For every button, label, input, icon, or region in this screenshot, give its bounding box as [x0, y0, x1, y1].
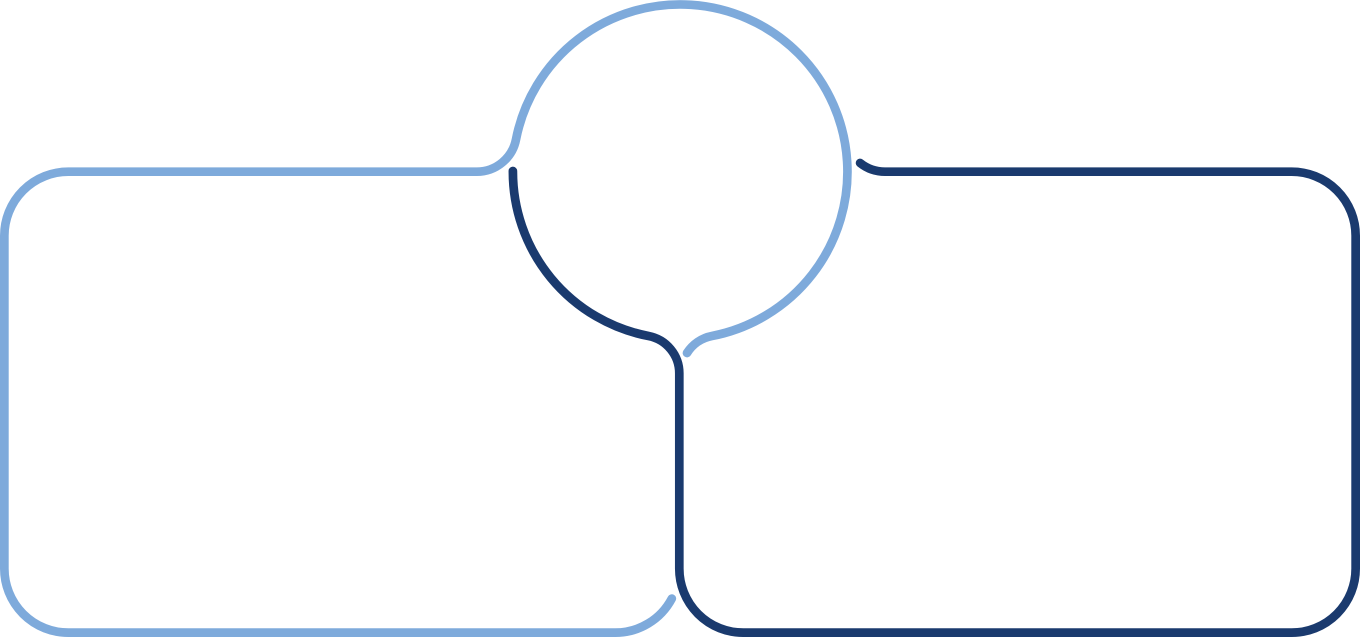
- panel outline: light blue left panel with circle: [4, 4, 847, 633]
- panel outline: dark navy right panel with circle arc: [513, 163, 1356, 633]
